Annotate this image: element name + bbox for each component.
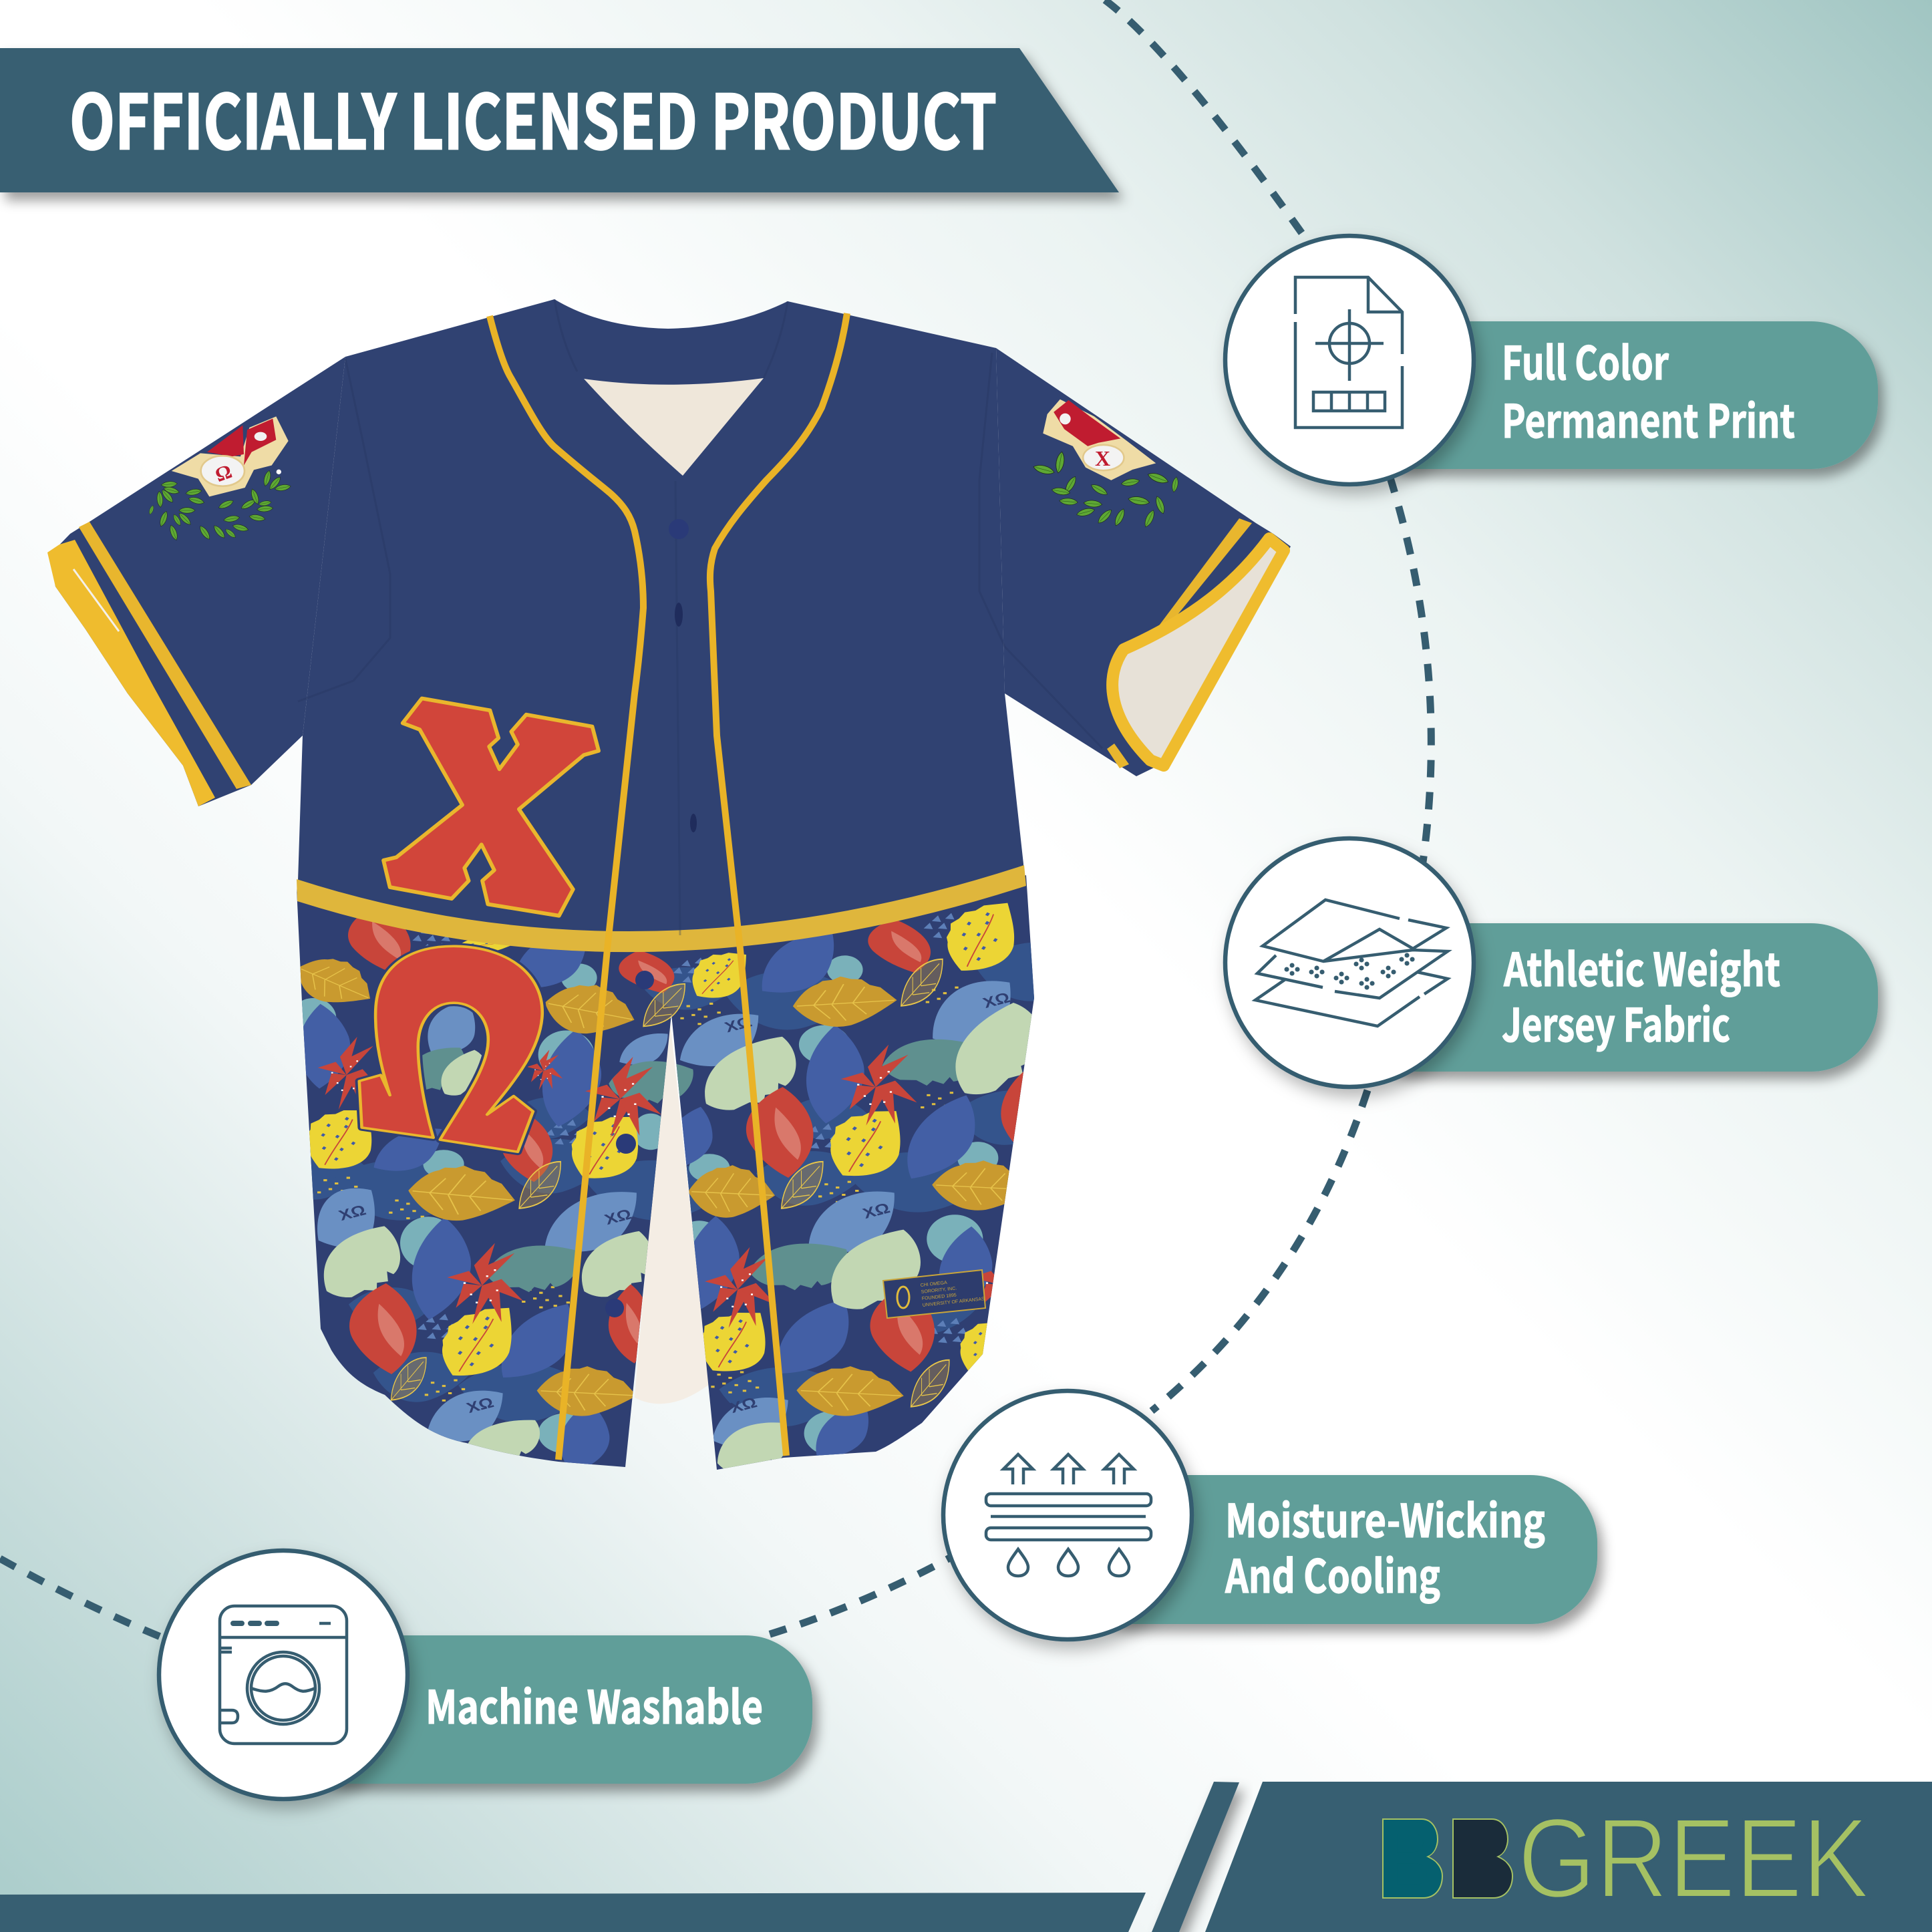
XΩ small marks on leaves: XΩ	[337, 1202, 369, 1224]
feature: full color print	[1225, 236, 1878, 484]
jersey body	[298, 299, 1026, 949]
panel shape	[1205, 1782, 1932, 1932]
feature: athletic weight fabric	[1225, 838, 1878, 1087]
ochre leaves	[286, 947, 1037, 1420]
XΩ small marks on leaves: XΩ	[464, 1395, 496, 1416]
left sleeve crest	[148, 416, 291, 541]
XΩ small marks on leaves: XΩ	[981, 990, 1013, 1011]
light teal blobs	[290, 955, 998, 1456]
inner lining below slit	[635, 1002, 709, 1404]
circle	[159, 1551, 408, 1799]
right piping	[710, 313, 847, 1456]
logo: BB	[1378, 1799, 1514, 1919]
buttons	[605, 519, 697, 1317]
inner back lining at neck	[584, 378, 764, 476]
icon: fabric layers	[1255, 900, 1448, 1026]
letter chi	[383, 698, 599, 916]
placket line	[675, 481, 680, 935]
letter omega	[359, 946, 542, 1152]
pill	[283, 1635, 812, 1784]
muted teal leaves	[399, 1031, 983, 1297]
feature: machine washable	[159, 1551, 812, 1799]
bottom left bar	[0, 1893, 1146, 1932]
logo: GREEK: GREEK	[1518, 1795, 1869, 1922]
woven tag: FOUNDED 1895	[922, 1293, 957, 1301]
pill	[1067, 1475, 1597, 1624]
left sleeve	[47, 357, 345, 806]
slanted stripe	[1152, 1782, 1239, 1932]
XΩ small marks on leaves	[337, 990, 1013, 1416]
circle	[943, 1391, 1192, 1639]
pill	[1349, 321, 1878, 469]
right sleeve crest	[1033, 399, 1179, 528]
pill	[1349, 923, 1878, 1072]
dark blue leaves	[263, 926, 1102, 1443]
dashed connector arc	[0, 0, 1431, 1637]
red leaves	[335, 903, 1060, 1377]
waistband	[297, 865, 1026, 952]
yellow leaves	[287, 889, 1039, 1390]
XΩ small marks on leaves: XΩ	[728, 1395, 760, 1416]
header banner	[0, 48, 1119, 192]
triangle and speck fills	[305, 913, 974, 1400]
XΩ small marks on leaves: XΩ	[723, 1014, 754, 1035]
jersey	[47, 299, 1291, 1479]
right sleeve crest: X	[1095, 447, 1110, 470]
outlined leaves	[391, 959, 949, 1407]
red spiky leaves	[318, 1037, 1042, 1328]
label: Machine Washable	[426, 1671, 763, 1737]
royal blue leaves	[285, 922, 1011, 1479]
circle	[1225, 236, 1474, 484]
label: Permanent Print	[1502, 385, 1795, 451]
label	[1225, 1484, 1545, 1606]
circle	[1225, 838, 1474, 1087]
label: Jersey Fabric	[1502, 989, 1730, 1055]
tropical leaf print	[297, 875, 1034, 1470]
left piping	[490, 316, 643, 1460]
label: Full Color	[1502, 327, 1669, 393]
label	[1502, 327, 1795, 451]
XΩ small marks on leaves: XΩ	[860, 1200, 893, 1222]
logo: BB: B	[1448, 1799, 1514, 1919]
icon: wicking layers	[986, 1454, 1151, 1576]
fold seams	[298, 299, 1102, 748]
sage leaves	[304, 999, 1066, 1476]
woven tag	[883, 1270, 985, 1318]
right sleeve	[996, 348, 1291, 776]
bottom right logo panel	[1205, 1782, 1932, 1932]
banner shape	[0, 48, 1119, 192]
woven tag: SORORITY, INC.	[921, 1286, 957, 1295]
pale blue leaves	[299, 973, 1032, 1455]
logo: BB: B	[1378, 1799, 1444, 1919]
label	[1502, 933, 1780, 1055]
feature: moisture wicking	[943, 1391, 1597, 1639]
label: Moisture-Wicking	[1225, 1484, 1545, 1551]
label: And Cooling	[1225, 1540, 1440, 1606]
icon: print file	[1295, 277, 1402, 428]
left sleeve crest: Ω	[212, 460, 235, 486]
icon: washing machine	[220, 1606, 347, 1744]
title: OFFICIALLY LICENSED PRODUCT	[69, 63, 997, 171]
woven tag: CHI OMEGA	[920, 1281, 947, 1288]
label: Athletic Weight	[1503, 933, 1780, 999]
woven tag: UNIVERSITY OF ARKANSAS	[923, 1297, 985, 1308]
XΩ small marks on leaves: XΩ	[603, 1206, 634, 1228]
